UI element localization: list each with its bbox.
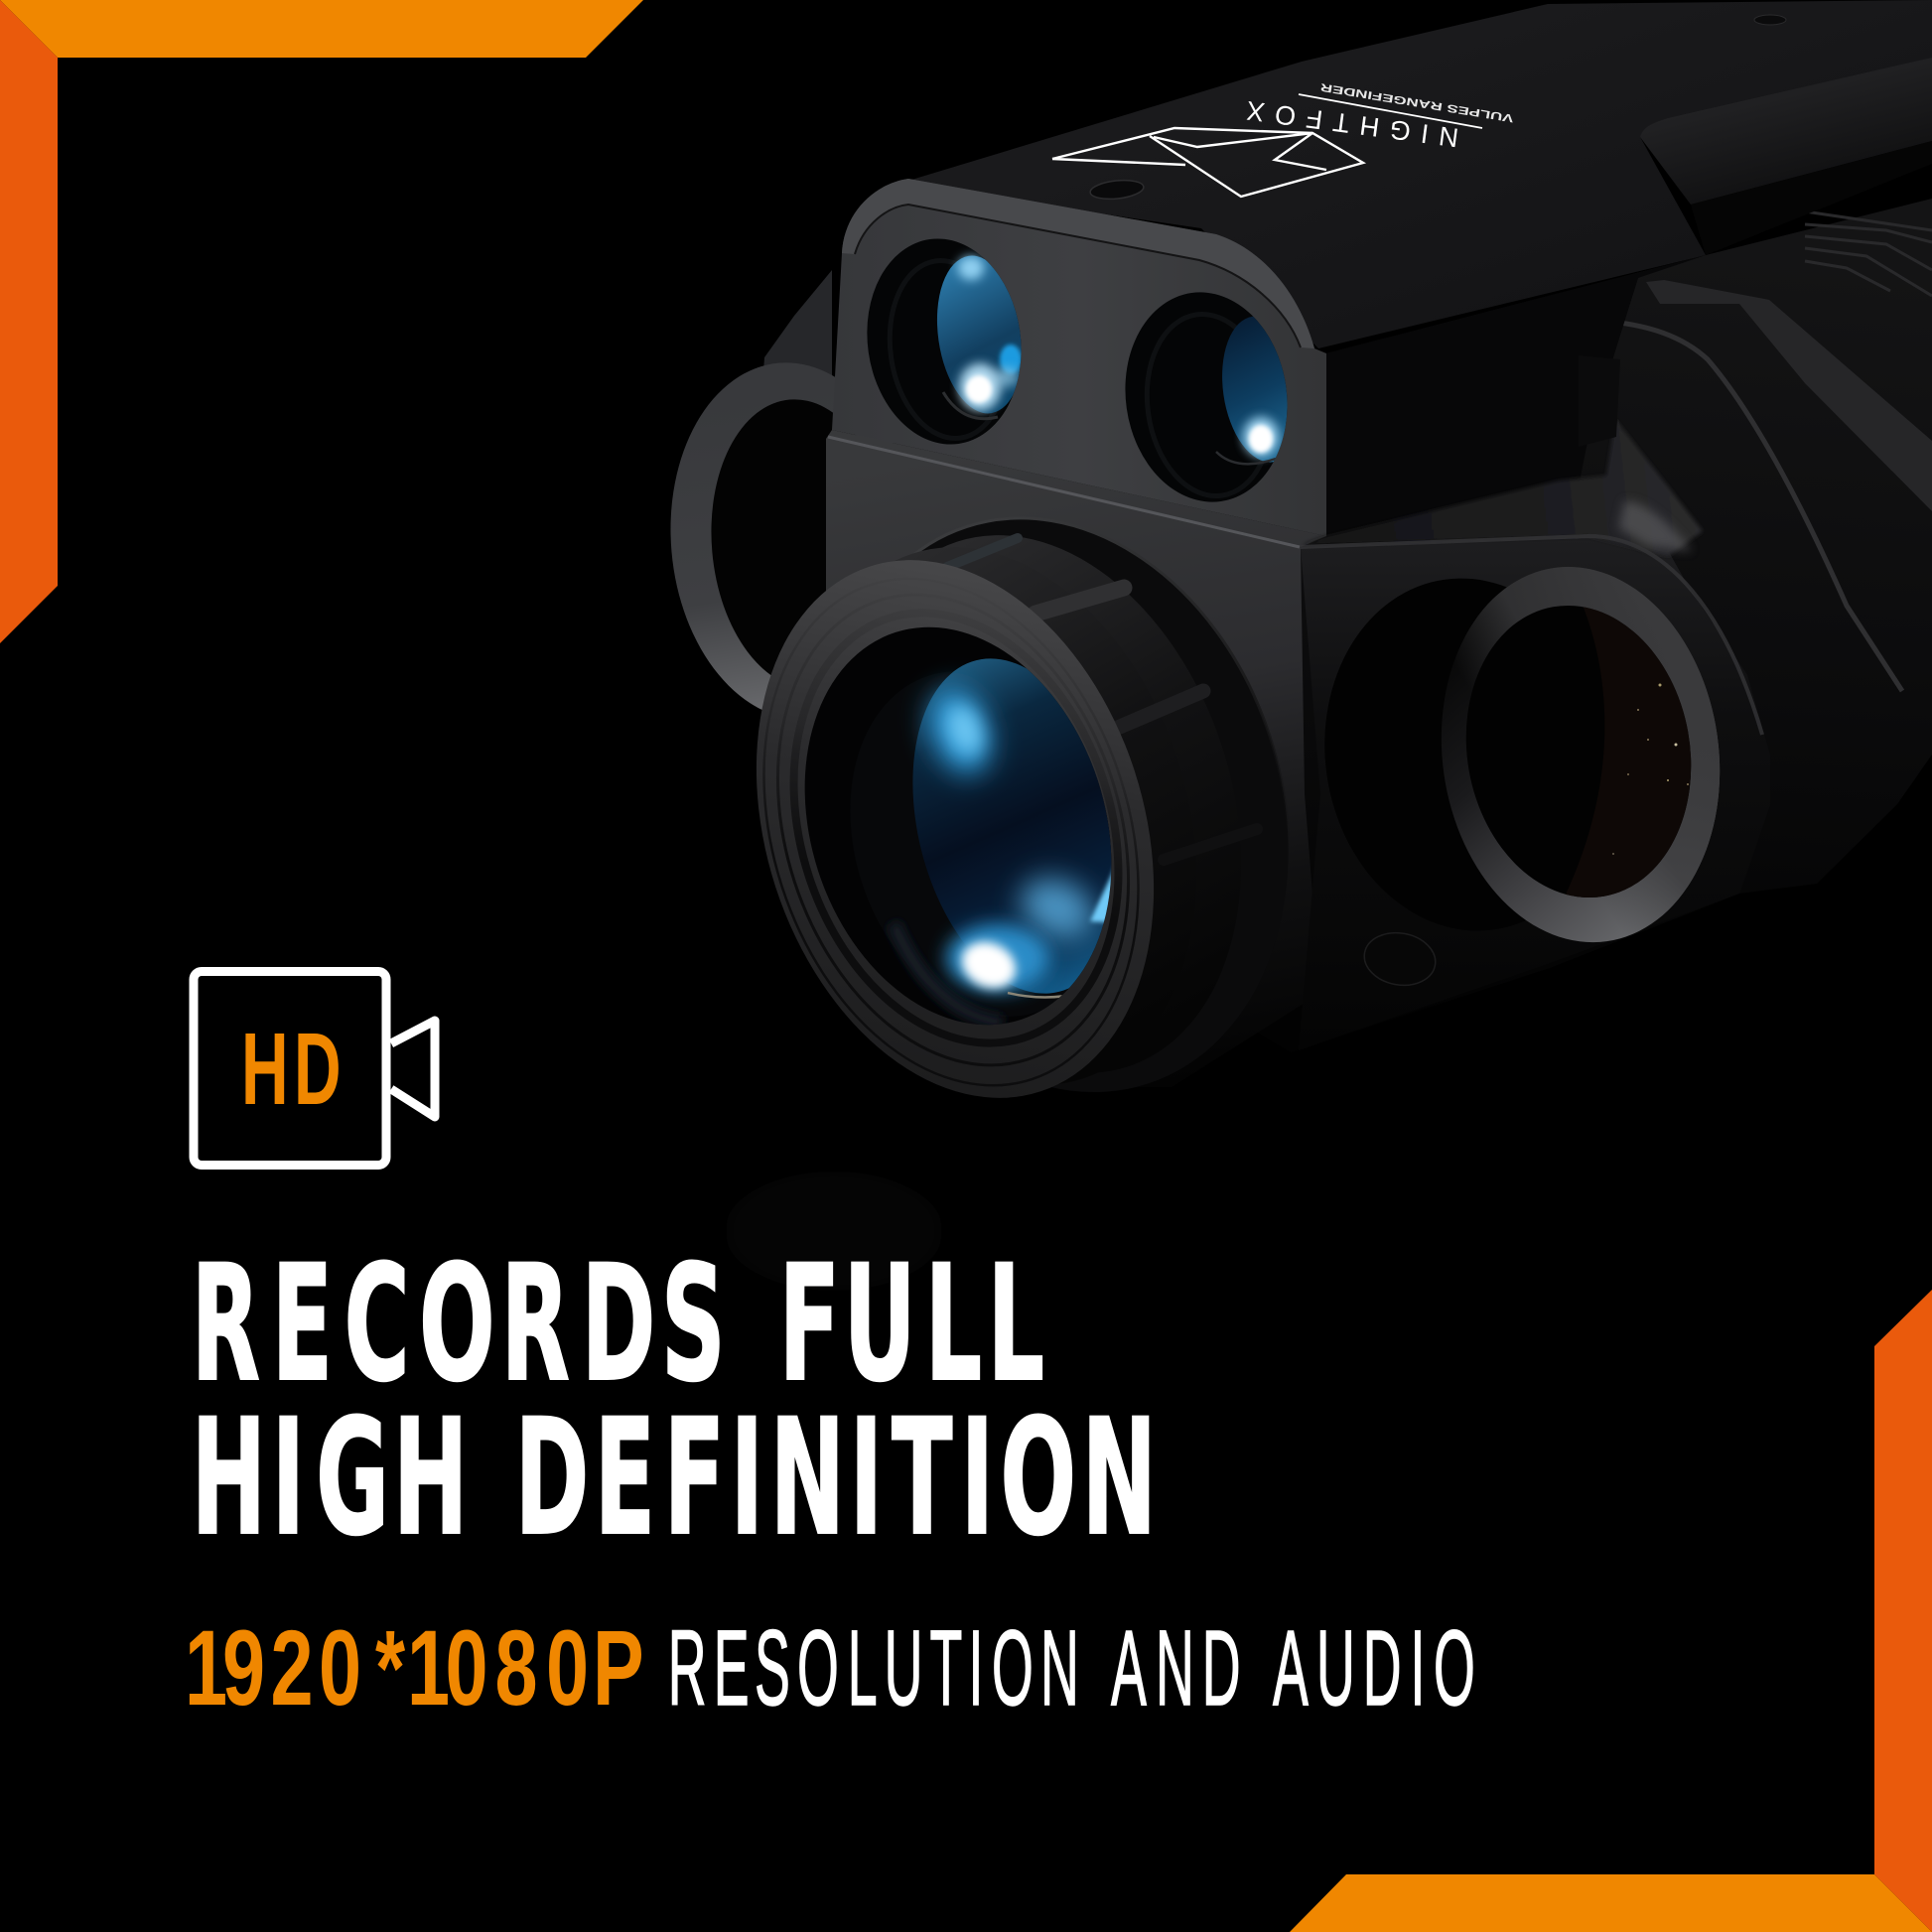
objective opening bbox=[1444, 588, 1714, 915]
plate lit rim bbox=[842, 179, 1314, 348]
frame: top left corner orange bar bbox=[0, 0, 643, 58]
body ridge lower bbox=[1611, 322, 1902, 691]
inner metal ring bbox=[807, 636, 1159, 1051]
rear left eyepiece ring bbox=[656, 270, 932, 730]
main lens bbox=[884, 658, 1112, 1025]
glass highlight right wedge bbox=[1088, 868, 1112, 925]
screen hood bbox=[1640, 58, 1932, 205]
title: RECORDS FULL bbox=[192, 1231, 1044, 1417]
frame: bottom right corner red-orange bar bbox=[1874, 1290, 1932, 1932]
subtitle: RESOLUTION AND AUDIO bbox=[668, 1609, 1475, 1728]
title: HIGH DEFINITION bbox=[192, 1385, 1157, 1571]
top rear screw bbox=[1754, 15, 1786, 25]
subtitle bbox=[185, 1607, 1475, 1728]
hood shadow bbox=[1691, 141, 1932, 255]
rubber ring grooves bbox=[702, 530, 1200, 1134]
title bbox=[192, 1231, 1157, 1571]
objective ring top light bbox=[1418, 549, 1743, 960]
objective glass with dust bbox=[1566, 608, 1692, 897]
icon: HD video camera: HD bbox=[241, 1013, 342, 1127]
lower front body bbox=[826, 430, 1326, 1087]
glass highlight middle bbox=[1012, 868, 1103, 949]
product name: VULPES RANGEFINDER bbox=[1319, 80, 1514, 124]
rangefinder side wall bbox=[1314, 255, 1706, 546]
grip fins bbox=[1805, 211, 1932, 296]
night vision rangefinder device bbox=[671, 0, 1932, 1098]
objective outer ring bbox=[1418, 549, 1743, 960]
glass hot spot bbox=[954, 933, 1024, 997]
left laser lens bbox=[867, 238, 1022, 445]
lower edge highlight bbox=[828, 437, 1300, 547]
frame: top left corner red-orange bar bbox=[0, 0, 58, 643]
eyepiece barrel bbox=[733, 483, 1308, 1137]
bracket facet bbox=[1303, 419, 1703, 556]
eyepiece seat bbox=[755, 458, 1360, 1153]
housing arc highlight bbox=[1301, 536, 1762, 735]
rangefinder front plate bbox=[832, 179, 1326, 536]
metal lip bbox=[1008, 993, 1082, 997]
right objective housing bbox=[1301, 420, 1764, 986]
housing screw bbox=[1360, 927, 1440, 991]
subtitle: 1920*1080P bbox=[185, 1607, 644, 1727]
body ridge upper bbox=[1646, 280, 1932, 511]
barrel ridges bbox=[947, 538, 1257, 860]
glass glow bottom bbox=[946, 924, 1049, 992]
bracket highlight bbox=[1618, 501, 1692, 551]
frame: bottom right corner orange bar bbox=[1290, 1874, 1932, 1932]
objective recess bbox=[1303, 560, 1636, 949]
plate seam bbox=[855, 205, 1301, 347]
brand name: NIGHTFOX bbox=[1245, 95, 1460, 153]
logo mark bbox=[1052, 128, 1363, 197]
glass bbox=[913, 658, 1112, 994]
glass highlight upper bbox=[919, 681, 1001, 782]
cover screw hole bbox=[1089, 178, 1145, 202]
top cover bbox=[898, 0, 1932, 348]
right laser lens bbox=[1126, 292, 1288, 502]
faint table reflection bbox=[725, 1172, 943, 1291]
ring opening bbox=[756, 587, 1161, 1065]
brand rule bbox=[1299, 94, 1482, 128]
inner ring lower glint bbox=[894, 923, 1003, 1023]
right main body bbox=[1191, 199, 1932, 1052]
eyepiece rubber ring bbox=[757, 560, 1154, 1098]
bracket notch bbox=[1579, 355, 1620, 447]
icon: HD video camera bbox=[194, 971, 435, 1166]
